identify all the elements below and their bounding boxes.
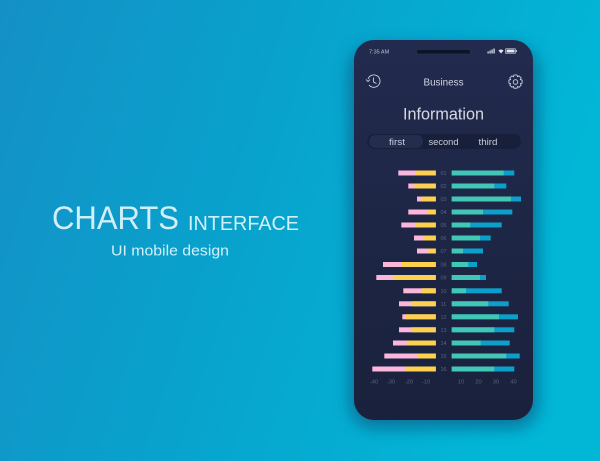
status bar: 7:35 AM <box>369 50 390 56</box>
chart: x axis labels: -40 <box>370 380 378 386</box>
tabs <box>367 134 521 149</box>
chart: row numbers: 06 <box>440 236 447 242</box>
tabs: third <box>478 137 498 147</box>
chart: row numbers: 03 <box>440 197 447 203</box>
chart: row numbers: 12 <box>440 315 447 321</box>
icon: history <box>366 75 380 87</box>
chart: x axis labels: 30 <box>493 380 499 386</box>
subtitle: UI mobile design <box>111 242 229 260</box>
chart: row numbers: 08 <box>440 262 447 268</box>
chart: x axis labels: -10 <box>422 380 430 386</box>
chart: x axis labels: -30 <box>387 380 395 386</box>
icon: settings gear <box>509 75 522 88</box>
chart: x axis labels <box>370 380 517 386</box>
status bar <box>369 48 517 56</box>
chart: left bars <box>372 170 436 372</box>
chart: x axis labels: -20 <box>405 380 413 386</box>
heading: information: Information <box>403 106 484 124</box>
chart: row numbers: 05 <box>440 223 447 229</box>
chart: row numbers: 15 <box>440 354 447 360</box>
chart: row numbers: 04 <box>440 210 447 216</box>
heading: charts interface: CHARTS <box>52 200 179 236</box>
chart: x axis labels: 10 <box>458 380 464 386</box>
chart: row numbers: 13 <box>440 328 447 334</box>
chart: right bars <box>452 170 521 372</box>
chart: row numbers: 02 <box>440 184 447 190</box>
tabs: second <box>428 137 458 147</box>
chart: row numbers: 10 <box>440 289 447 295</box>
screen title: business: Business <box>424 76 464 88</box>
heading: charts interface: INTERFACE <box>188 213 299 235</box>
chart: x axis labels: 20 <box>475 380 482 386</box>
tabs: first <box>389 137 406 147</box>
chart: row numbers: 16 <box>440 367 447 373</box>
phone <box>350 40 538 428</box>
heading: charts interface <box>52 200 299 236</box>
chart: row numbers: 09 <box>440 276 447 282</box>
chart: row numbers: 07 <box>440 249 447 255</box>
chart: row numbers: 01 <box>440 171 447 177</box>
chart: row numbers <box>440 171 447 373</box>
chart: x axis labels: 40 <box>510 380 517 386</box>
chart: row numbers: 11 <box>441 302 446 308</box>
chart: row numbers: 14 <box>440 341 447 347</box>
